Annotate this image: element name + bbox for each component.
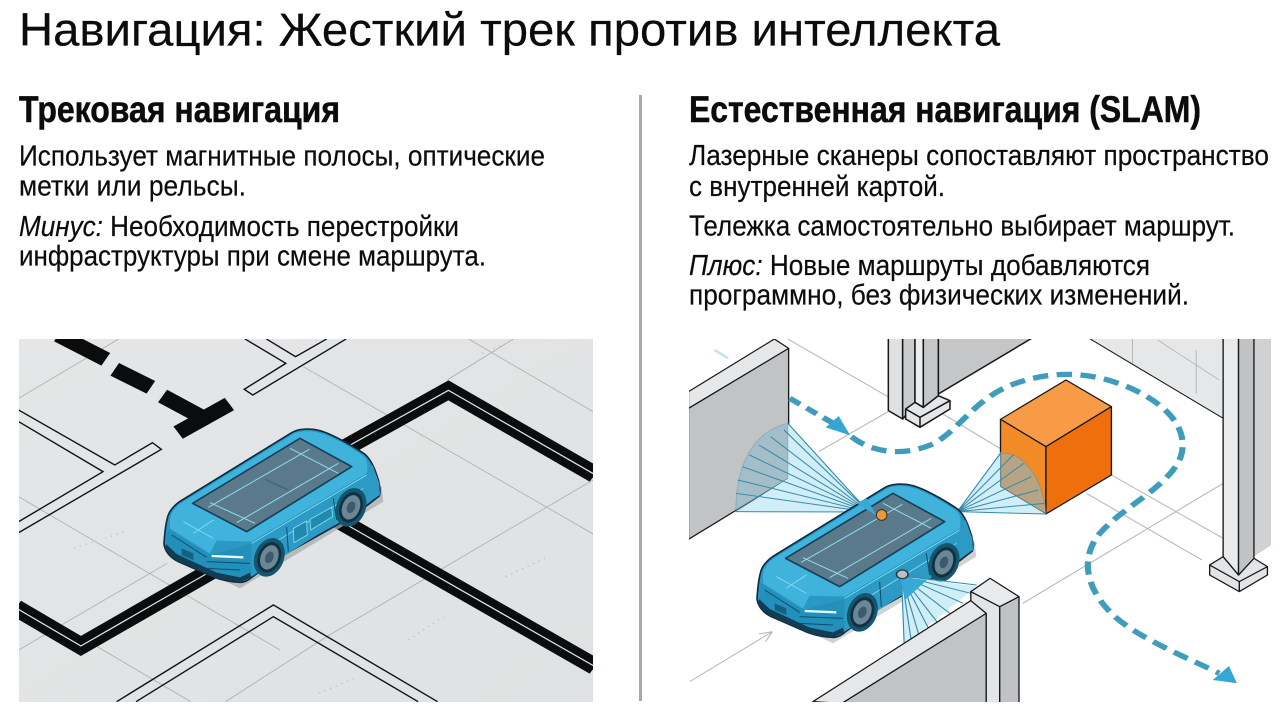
left wall bbox=[688, 339, 789, 539]
foreground wall with side scanner bbox=[813, 570, 1019, 703]
back wall right bbox=[1090, 337, 1223, 418]
dashed route bbox=[790, 374, 1219, 673]
dashed black track bbox=[58, 335, 229, 433]
text block: SLAM benefit: Плюс: Новые маршруты добавляются bbox=[689, 250, 1150, 282]
column: right bbox=[1210, 337, 1271, 592]
icon: scanner fan towards left wall bbox=[736, 423, 869, 512]
panel: SLAM navigation illustration bbox=[688, 337, 1272, 703]
orange box obstacle bbox=[1000, 380, 1111, 514]
text block: track description bbox=[19, 140, 545, 202]
icon: blue cart on track bbox=[164, 429, 383, 588]
floor and tracks bbox=[16, 335, 595, 702]
text block: track drawback: Минус: Необходимость перестройки bbox=[19, 211, 459, 243]
text block: route selection: Тележка самостоятельно выбирает маршрут. bbox=[689, 210, 1235, 242]
heading: SLAM navigation: Естественная навигация (SLAM) bbox=[689, 89, 1201, 130]
text block: SLAM description: с внутренней картой. bbox=[689, 171, 945, 203]
floor lines bbox=[690, 339, 1223, 682]
text block: SLAM benefit: программно, без физических изменений. bbox=[689, 280, 1189, 312]
arrowheads on route bbox=[826, 416, 1237, 683]
title: Навигация: Жесткий трек против интеллекта bbox=[19, 4, 1000, 56]
small teal arrow stub bbox=[715, 350, 728, 358]
warehouse scene bbox=[688, 337, 1271, 682]
panel: track navigation illustration bbox=[16, 335, 595, 702]
text block: SLAM benefit bbox=[689, 250, 1189, 312]
column and back wall centre bbox=[888, 337, 1033, 427]
icon: scanner fan towards box bbox=[957, 452, 1046, 514]
text block: track drawback: инфраструктуры при смене маршрута. bbox=[19, 240, 486, 272]
text block: track description: метки или рельсы. bbox=[19, 170, 246, 202]
text block: track drawback bbox=[19, 211, 486, 272]
foreground wall bbox=[813, 578, 1019, 703]
panel: SLAM navigation text bbox=[689, 89, 1269, 312]
icon: blue cart with sensors bbox=[757, 484, 976, 643]
main black track bbox=[16, 390, 595, 667]
panel: track navigation text bbox=[19, 89, 545, 272]
text block: track description: Использует магнитные полосы, оптические bbox=[19, 140, 545, 172]
heading: track navigation: Трековая навигация bbox=[19, 89, 340, 130]
text block: SLAM description bbox=[689, 140, 1269, 203]
divider between columns bbox=[639, 95, 642, 701]
icon: scanner fan from cart side bbox=[896, 570, 977, 645]
thin outlined guides bbox=[19, 339, 438, 702]
